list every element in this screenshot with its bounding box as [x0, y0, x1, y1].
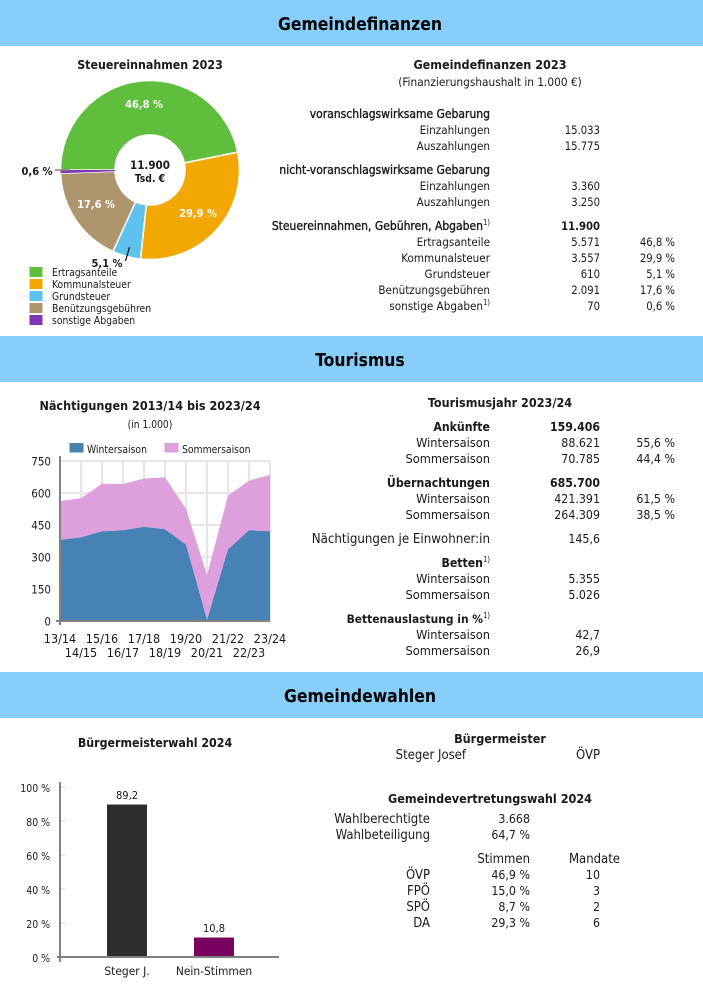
table rows: 15.033	[565, 124, 600, 137]
x axis labels: Nein-Stimmen	[176, 964, 252, 978]
table rows: 29,9 %	[640, 252, 675, 265]
table rows: 70	[587, 300, 600, 313]
y axis labels: 60 %	[26, 851, 50, 863]
table rows: 685.700	[550, 476, 600, 490]
election rows: Mandate	[569, 852, 620, 867]
panel: Bürgermeisterwahl bar chart	[20, 736, 279, 978]
donut center total: 11.900	[130, 158, 170, 172]
election rows	[334, 812, 620, 931]
y axis labels: 80 %	[26, 817, 50, 829]
chart title: Bürgermeisterwahl 2024	[78, 736, 232, 750]
legend: Benützungsgebühren	[52, 303, 151, 315]
x axis labels: 14/15	[65, 645, 97, 660]
table rows: Sommersaison	[406, 507, 490, 522]
election rows: 3.668	[498, 812, 530, 826]
election rows: 2	[593, 900, 600, 914]
table title: (Finanzierungshaushalt in 1.000 €)	[398, 75, 582, 89]
election rows: 15,0 %	[491, 884, 530, 898]
header: Tourismus	[0, 336, 703, 382]
x axis labels: 13/14	[44, 631, 76, 646]
Gemeindevertretungswahl title: Gemeindevertretungswahl 2024	[388, 791, 592, 806]
chart legend: Sommersaison	[182, 444, 251, 456]
bar value labels: 10,8	[203, 922, 225, 935]
election rows: 10	[586, 868, 600, 882]
y axis labels: 20 %	[26, 919, 50, 931]
table title: Tourismusjahr 2023/24	[428, 395, 572, 410]
panel: Gemeindefinanzen table	[272, 57, 675, 313]
table rows: 145,6	[568, 532, 600, 546]
table rows: 17,6 %	[640, 284, 675, 297]
table rows: 3.250	[571, 196, 600, 209]
y axis labels: 150	[31, 582, 51, 596]
table rows: 610	[581, 268, 600, 281]
election rows: 6	[593, 916, 600, 930]
table rows: Wintersaison	[416, 571, 490, 586]
table rows: 3.557	[571, 252, 600, 265]
election rows: FPÖ	[407, 882, 430, 899]
table rows: Ankünfte	[433, 420, 490, 434]
table rows: 1)	[483, 218, 490, 227]
panel: Tourismus table	[312, 395, 675, 658]
header: Gemeindefinanzen: Gemeindefinanzen	[278, 15, 442, 35]
x axis labels: Steger J.	[104, 964, 150, 978]
donut labels: 17,6 %	[77, 198, 115, 211]
panel: Steuereinnahmen donut chart	[22, 58, 239, 327]
bar value labels: 89,2	[116, 789, 138, 802]
table rows: 5.026	[568, 588, 600, 602]
legend: Grundsteuer	[52, 291, 110, 303]
x axis labels: 23/24	[254, 631, 286, 646]
y axis labels	[31, 454, 51, 628]
table rows: 38,5 %	[636, 508, 675, 522]
x axis labels: 19/20	[170, 631, 202, 646]
table rows: 46,8 %	[640, 236, 675, 249]
donut labels: 29,9 %	[179, 207, 217, 220]
header: Tourismus: Tourismus	[315, 351, 405, 371]
chart legend: Wintersaison	[87, 444, 147, 456]
table rows: Sommersaison	[406, 451, 490, 466]
table rows: Wintersaison	[416, 627, 490, 642]
y axis labels: 0	[44, 614, 51, 628]
y axis labels: 40 %	[26, 885, 50, 897]
y axis labels: 100 %	[20, 783, 50, 795]
legend: Ertragsanteile	[52, 267, 118, 279]
table title: Gemeindefinanzen 2023	[413, 57, 567, 72]
table rows: 55,6 %	[636, 436, 675, 450]
header: Gemeindewahlen: Gemeindewahlen	[284, 687, 436, 707]
x axis labels: 16/17	[107, 645, 139, 660]
table rows: Nächtigungen je Einwohner:in	[312, 532, 490, 547]
table rows: Ertragsanteile	[417, 235, 490, 249]
chart legend	[70, 443, 251, 456]
table rows: Wintersaison	[416, 491, 490, 506]
x axis labels: 20/21	[191, 645, 223, 660]
donut center total	[130, 158, 170, 185]
table rows: Wintersaison	[416, 435, 490, 450]
table rows: 159.406	[550, 420, 600, 434]
header: Gemeindewahlen	[0, 672, 703, 718]
panel: Nächtigungen area chart	[31, 398, 286, 660]
table rows: Bettenauslastung in %	[347, 612, 483, 626]
table rows: nicht-voranschlagswirksame Gebarung	[279, 163, 490, 177]
table rows: 61,5 %	[636, 492, 675, 506]
x axis labels: 17/18	[128, 631, 160, 646]
x axis labels: 22/23	[233, 645, 265, 660]
chart title: Nächtigungen 2013/14 bis 2023/24	[39, 398, 261, 413]
table rows: Kommunalsteuer	[401, 251, 491, 265]
election rows: Wahlbeteiligung	[336, 828, 430, 843]
table rows: 0,6 %	[646, 300, 675, 313]
donut center total: Tsd. €	[135, 173, 165, 185]
Bürgermeister block	[396, 731, 600, 763]
table rows: 5.355	[568, 572, 600, 586]
table rows: Grundsteuer	[425, 267, 491, 281]
election rows: ÖVP	[406, 866, 430, 883]
table rows	[272, 107, 675, 313]
area plot	[56, 456, 270, 625]
donut labels: 5,1 %	[92, 257, 123, 270]
x axis labels	[44, 631, 286, 660]
election rows: DA	[413, 916, 430, 931]
table rows: voranschlagswirksame Gebarung	[310, 107, 490, 121]
table rows: sonstige Abgaben	[389, 299, 483, 313]
table rows: 70.785	[561, 452, 600, 466]
legend: Kommunalsteuer	[52, 279, 131, 291]
x axis labels: 21/22	[212, 631, 244, 646]
table rows: Auszahlungen	[417, 195, 490, 209]
x axis labels: 15/16	[86, 631, 118, 646]
election rows: 64,7 %	[491, 828, 530, 842]
header: Gemeindefinanzen	[0, 0, 703, 46]
leader lines	[55, 170, 130, 261]
table rows: 15.775	[565, 140, 600, 153]
y axis labels	[20, 783, 50, 965]
election rows: 46,9 %	[491, 868, 530, 882]
y axis labels: 600	[31, 486, 51, 500]
table rows: 5,1 %	[646, 268, 675, 281]
table title	[398, 57, 582, 89]
table rows: 264.309	[554, 508, 600, 522]
y axis labels: 300	[31, 550, 51, 564]
x axis labels: 18/19	[149, 645, 181, 660]
table rows: Steuereinnahmen, Gebühren, Abgaben	[272, 219, 483, 233]
donut labels	[22, 98, 217, 270]
donut labels: 0,6 %	[22, 165, 53, 178]
y axis labels: 450	[31, 518, 51, 532]
bar value labels	[116, 789, 225, 935]
table rows: Sommersaison	[406, 643, 490, 658]
chart title: Steuereinnahmen 2023	[77, 58, 223, 72]
election rows: SPÖ	[406, 898, 430, 915]
table rows: 11.900	[561, 220, 600, 233]
y axis labels: 0 %	[32, 953, 50, 965]
table rows: Einzahlungen	[420, 123, 490, 137]
panel: Wahlen table	[334, 731, 620, 931]
Bürgermeister block: Bürgermeister	[454, 731, 546, 746]
bar plot	[57, 782, 279, 962]
election rows: Wahlberechtigte	[334, 812, 430, 827]
table rows: 42,7	[575, 628, 600, 642]
legend: sonstige Abgaben	[52, 315, 135, 327]
table rows: 88.621	[561, 436, 600, 450]
table rows: Sommersaison	[406, 587, 490, 602]
table rows: 5.571	[571, 236, 600, 249]
y axis labels: 750	[31, 454, 51, 468]
table rows: 421.391	[554, 492, 600, 506]
donut labels: 46,8 %	[125, 98, 163, 111]
table rows: Einzahlungen	[420, 179, 490, 193]
legend	[30, 267, 151, 327]
table rows: Betten	[441, 556, 483, 570]
chart title: (in 1.000)	[128, 420, 172, 431]
table rows: 26,9	[575, 644, 600, 658]
table rows: Auszahlungen	[417, 139, 490, 153]
table rows: 1)	[483, 298, 490, 307]
x axis labels	[104, 964, 252, 978]
election rows: Stimmen	[477, 852, 530, 867]
table rows: Übernachtungen	[387, 475, 490, 490]
Bürgermeister block: Steger Josef	[396, 748, 467, 763]
donut chart	[60, 81, 239, 260]
table rows: 3.360	[571, 180, 600, 193]
Bürgermeister block: ÖVP	[576, 746, 600, 763]
table rows: 1)	[483, 611, 490, 620]
table rows: 2.091	[571, 284, 600, 297]
election rows: 8,7 %	[498, 900, 530, 914]
table rows: 44,4 %	[636, 452, 675, 466]
election rows: 29,3 %	[491, 916, 530, 930]
table rows	[312, 420, 675, 658]
election rows: 3	[593, 884, 600, 898]
table rows: Benützungsgebühren	[378, 283, 490, 297]
table rows: 1)	[483, 555, 490, 564]
chart title	[39, 398, 261, 431]
